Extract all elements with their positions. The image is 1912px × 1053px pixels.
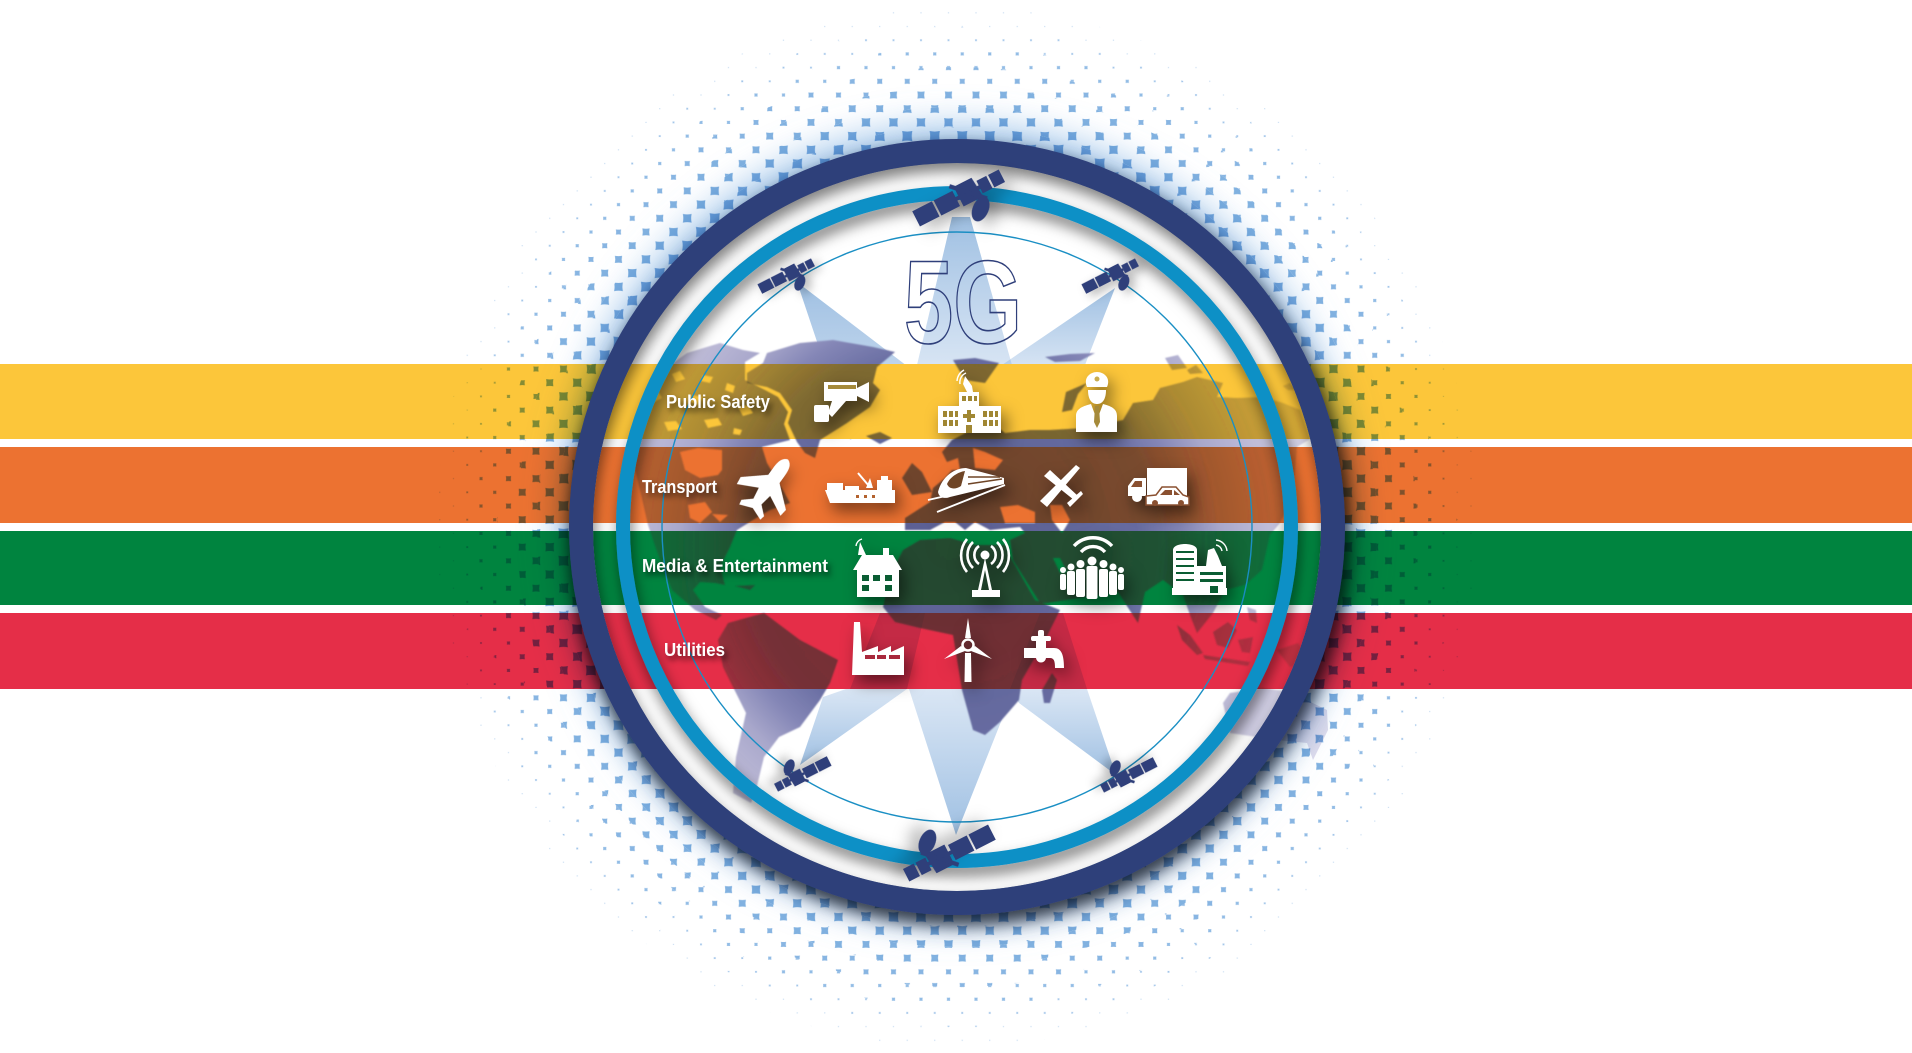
label: Public Safety: Public Safety — [666, 392, 770, 412]
Australia lobe beyond ring — [1223, 688, 1328, 760]
inner disc with map and bands — [590, 160, 1330, 900]
beam shading on red band — [850, 613, 1087, 689]
coloured bands — [0, 364, 1912, 689]
icon: surveillance camera — [814, 382, 869, 422]
icon: police officer — [1076, 372, 1117, 432]
icon: high speed train — [928, 468, 1005, 512]
satellite: bottom right — [1092, 743, 1160, 798]
icon: wind turbine — [944, 618, 992, 682]
land on bands — [635, 364, 1310, 689]
world map — [630, 340, 1328, 803]
icon: airliner — [727, 443, 811, 529]
blue glow around ring — [559, 127, 1355, 923]
icon: house with dish — [853, 539, 902, 597]
navy outer ring — [581, 151, 1333, 903]
icon: office building with dish — [1172, 540, 1227, 595]
icon: water tap — [1024, 630, 1064, 668]
inner bands — [590, 364, 1330, 689]
land on white — [630, 340, 1328, 803]
icon: connected crowd — [1060, 538, 1124, 599]
label: Utilities: Utilities — [664, 640, 725, 660]
satellite: top right — [1079, 253, 1147, 308]
icon: cargo ship — [825, 473, 895, 503]
satellite: top left — [755, 253, 823, 308]
satellite: bottom — [890, 801, 999, 890]
halftone dot halo — [447, 17, 1467, 1037]
thin orbit ring — [662, 232, 1252, 822]
dark ring shadow — [571, 147, 1351, 927]
label: Media & Entertainment: Media & Entertainment — [642, 556, 828, 576]
satellite: top — [909, 161, 1018, 250]
icon: factory — [852, 622, 904, 675]
icon: transmission tower — [961, 539, 1009, 597]
blue ring — [623, 193, 1291, 861]
beams — [797, 217, 1116, 835]
label: Transport: Transport — [642, 477, 717, 497]
5G heading: 5G — [904, 237, 1022, 369]
icon: light aircraft — [1040, 465, 1083, 507]
satellite: bottom left — [766, 742, 834, 797]
icon: truck and car — [1128, 468, 1189, 506]
icon: hospital — [938, 370, 1001, 433]
